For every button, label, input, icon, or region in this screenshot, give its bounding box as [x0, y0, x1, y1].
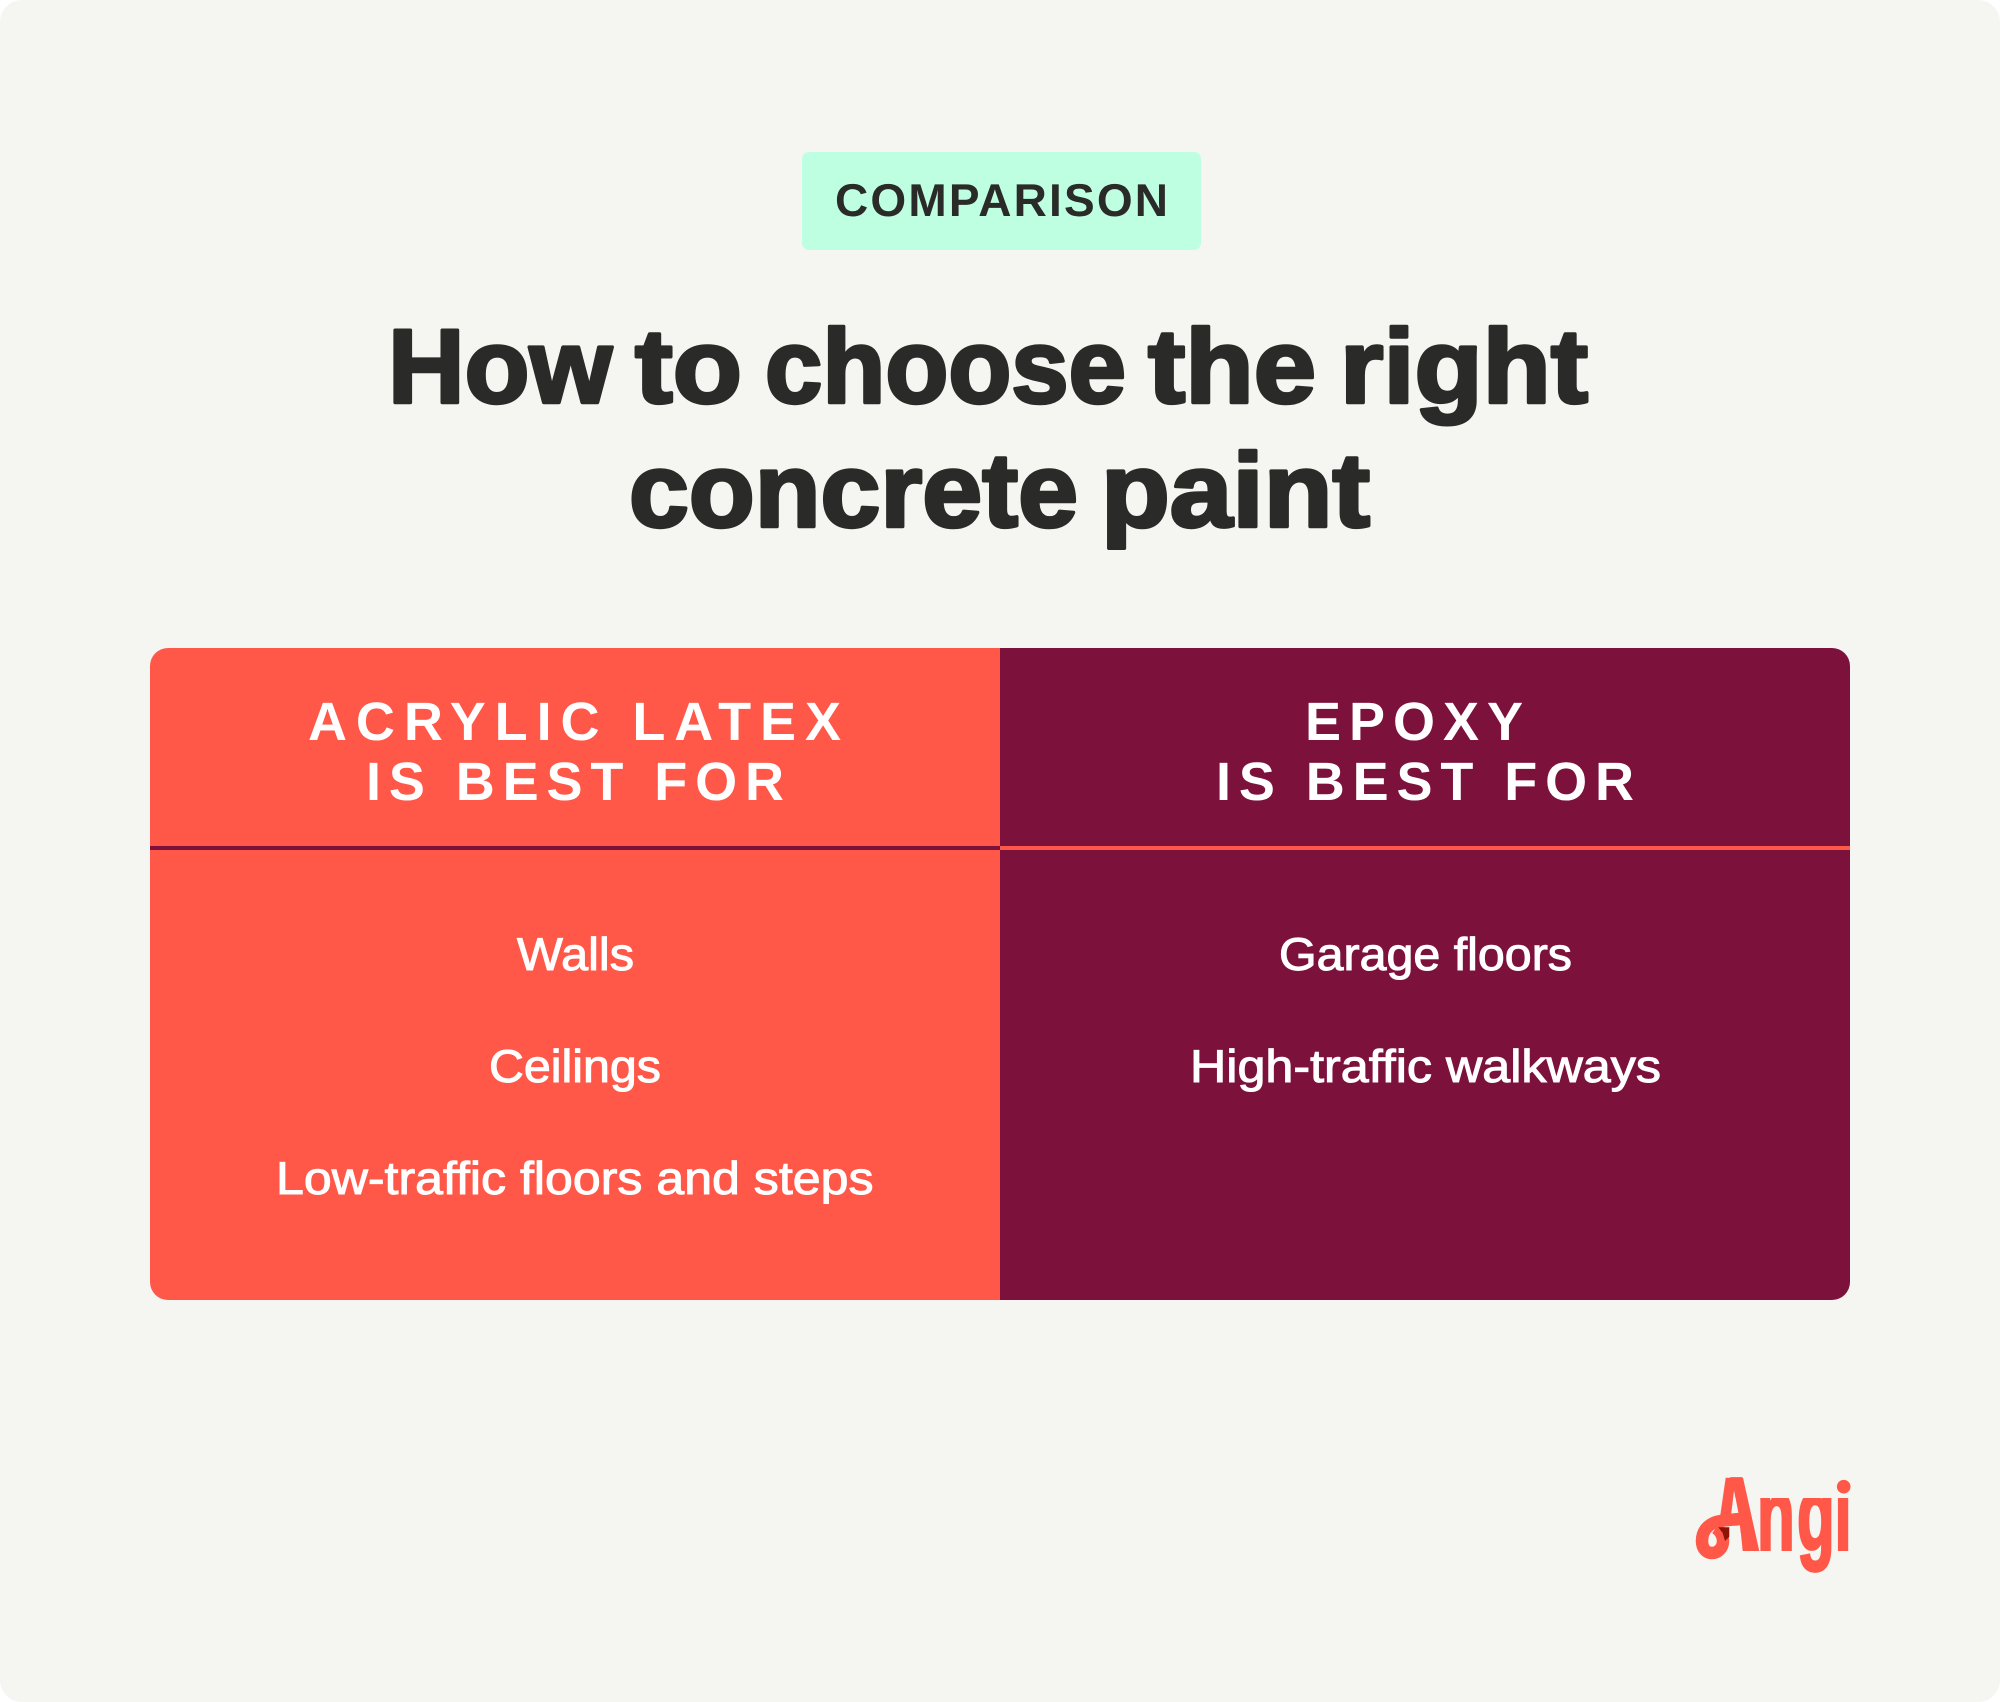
title line 2: concrete [629, 432, 1078, 550]
title line 1 [388, 308, 1588, 426]
epoxy list: Garage floors [1279, 928, 1572, 980]
acrylic heading [308, 692, 841, 812]
acrylic heading: ACRYLIC LATEX [308, 692, 841, 752]
acrylic list [276, 928, 874, 1204]
title line 1: How [388, 308, 612, 426]
title line 2 [629, 432, 1370, 550]
title [388, 308, 1588, 550]
acrylic list: Walls [517, 928, 634, 980]
epoxy heading: IS BEST FOR [1216, 752, 1634, 812]
title line 1: choose [765, 308, 1126, 426]
epoxy panel background [1000, 648, 1850, 1300]
acrylic panel background [150, 648, 1000, 1300]
epoxy list: High-traffic walkways [1190, 1040, 1661, 1092]
badge label: COMPARISON [835, 174, 1168, 226]
epoxy heading [1216, 692, 1634, 812]
title line 1: to [635, 308, 742, 426]
epoxy list [1190, 928, 1661, 1092]
title line 1: the [1148, 308, 1316, 426]
acrylic heading: IS BEST FOR [366, 752, 784, 812]
title line 1: right [1340, 308, 1588, 426]
panel: epoxy [1000, 648, 1850, 1300]
epoxy heading: EPOXY [1305, 692, 1523, 752]
category badge [802, 152, 1201, 250]
acrylic list: Low-traffic floors and steps [276, 1152, 874, 1204]
acrylic list: Ceilings [489, 1040, 661, 1092]
panel: acrylic latex [150, 648, 1000, 1300]
title line 2: paint [1101, 432, 1370, 550]
logo: Angi: Angi [1714, 1456, 1852, 1572]
